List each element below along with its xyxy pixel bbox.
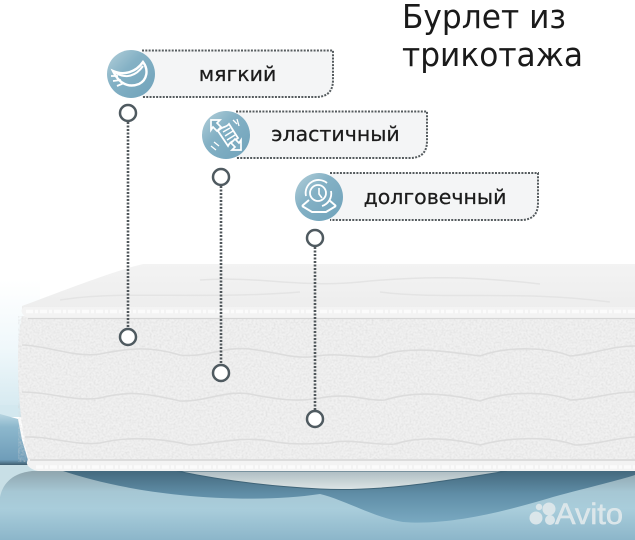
mattress [18,264,635,471]
lower piping band [27,459,635,471]
label: эластичный: эластичный [271,122,400,146]
label: мягкий [107,50,333,98]
callout pointer 3 [307,230,323,427]
icon: clock with cycle arrow [295,173,343,221]
label: долговечный: долговечный [364,185,506,209]
callout pointer 2 [213,169,229,381]
title [402,0,583,74]
mattress side panel [18,316,635,462]
background: scene behind the mattress [0,280,635,540]
mattress top surface [22,264,635,310]
title: трикотажа [402,36,583,74]
watermark: Avito: Avito [555,498,623,531]
upper piping band [22,307,635,319]
callout pointer 1 [120,105,136,345]
label: эластичный [202,111,427,159]
label: мягкий: мягкий [199,62,276,86]
quilting wave lines [22,345,635,445]
icon: stretch fabric [202,111,250,159]
icon: feather [107,50,155,98]
label: долговечный [295,173,538,221]
